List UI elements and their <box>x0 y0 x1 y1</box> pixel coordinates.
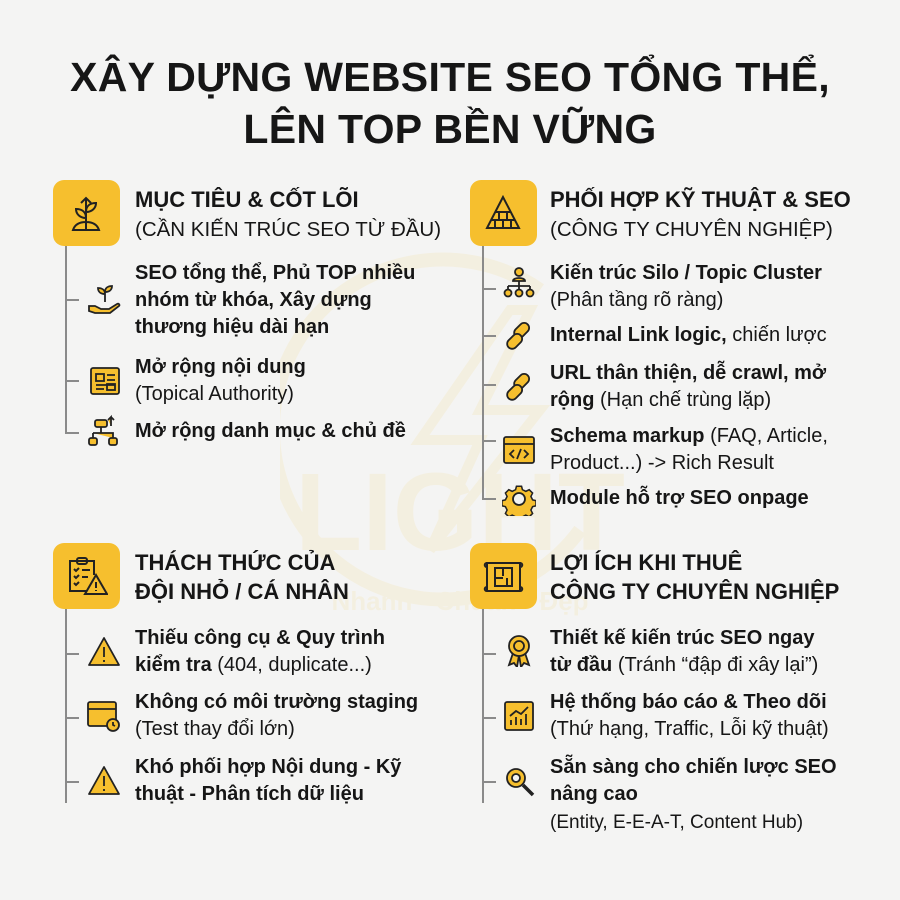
item: module <box>502 486 809 516</box>
item: thiet ke <box>508 627 818 676</box>
item: schema: Product...) -> Rich Result <box>550 452 774 474</box>
item: bao cao <box>504 691 829 740</box>
item: schema: Schema markup (FAQ, Article, <box>550 425 828 447</box>
heading: CÔNG TY CHUYÊN NGHIỆP <box>550 579 839 604</box>
item: staging <box>87 691 418 740</box>
panel: phoi hop ky thuat <box>470 180 851 516</box>
heading: (CẦN KIẾN TRÚC SEO TỪ ĐẦU) <box>135 218 441 241</box>
heading <box>550 550 839 604</box>
watermark logo <box>280 252 625 616</box>
item: bao cao: Hệ thống báo cáo & Theo dõi <box>550 691 827 713</box>
item: thiet ke: Thiết kế kiến trúc SEO ngay <box>550 627 815 649</box>
item: seo tong the: thương hiệu dài hạn <box>135 316 329 338</box>
heading: ĐỘI NHỎ / CÁ NHÂN <box>135 579 349 604</box>
item: thieu cong cu: Thiếu công cụ & Quy trình <box>135 627 385 649</box>
item: san sang: (Entity, E-E-A-T, Content Hub) <box>550 812 803 833</box>
item: san sang <box>506 754 837 833</box>
title: XÂY DỰNG WEBSITE SEO TỔNG THỂ, <box>70 54 830 100</box>
icon: blueprint <box>470 543 537 609</box>
item: url: URL thân thiện, dễ crawl, mở <box>550 362 826 384</box>
item: staging: (Test thay đổi lớn) <box>135 718 295 740</box>
panel: thach thuc <box>53 543 418 805</box>
item: kho phoi hop: Khó phối hợp Nội dung - Kỹ <box>135 756 401 778</box>
item: seo tong the <box>88 262 415 338</box>
item: kho phoi hop <box>88 756 402 805</box>
heading: MỤC TIÊU & CỐT LÕI <box>135 187 359 212</box>
item: thiet ke: từ đầu (Tránh “đập đi xây lại”) <box>550 654 818 676</box>
panel: loi ich <box>470 543 839 833</box>
item: internal link: Internal Link logic, chiến lược <box>550 324 827 346</box>
item: thieu cong cu <box>88 627 385 676</box>
watermark logo: LIGHT <box>295 451 625 574</box>
item: module: Module hỗ trợ SEO onpage <box>550 487 809 509</box>
icon: pyramid <box>470 180 537 246</box>
heading: PHỐI HỢP KỸ THUẬT & SEO <box>550 187 851 212</box>
item: mo rong noi dung: Mở rộng nội dung <box>135 356 306 378</box>
item: seo tong the: nhóm từ khóa, Xây dựng <box>135 289 372 311</box>
heading: LỢI ÍCH KHI THUÊ <box>550 550 742 575</box>
item: schema <box>503 425 828 474</box>
panel: muc tieu <box>53 180 441 446</box>
heading: THÁCH THỨC CỦA <box>135 550 335 575</box>
item: url <box>506 360 826 411</box>
item: silo <box>504 262 822 311</box>
heading <box>135 187 441 241</box>
item: san sang: nâng cao <box>550 783 638 805</box>
item: kho phoi hop: thuật - Phân tích dữ liệu <box>135 783 364 805</box>
icon: plant <box>53 180 120 246</box>
item: url: rộng (Hạn chế trùng lặp) <box>550 389 771 411</box>
item: internal link <box>506 322 827 350</box>
item: seo tong the: SEO tổng thể, Phủ TOP nhiều <box>135 262 415 284</box>
item: mo rong noi dung <box>90 356 306 405</box>
title <box>70 54 830 152</box>
item: staging: Không có môi trường staging <box>135 691 418 713</box>
item: thieu cong cu: kiểm tra (404, duplicate...) <box>135 654 372 676</box>
heading <box>550 187 851 241</box>
item: mo rong danh muc <box>88 415 406 446</box>
item: mo rong noi dung: (Topical Authority) <box>135 383 294 405</box>
title: LÊN TOP BỀN VỮNG <box>243 106 657 152</box>
item: silo: (Phân tầng rõ ràng) <box>550 289 723 311</box>
heading: (CÔNG TY CHUYÊN NGHIỆP) <box>550 218 833 241</box>
heading <box>135 550 349 604</box>
item: mo rong danh muc: Mở rộng danh mục & chủ đề <box>135 420 406 442</box>
item: silo: Kiến trúc Silo / Topic Cluster <box>550 262 822 284</box>
item: bao cao: (Thứ hạng, Traffic, Lỗi kỹ thuật) <box>550 718 829 740</box>
item: san sang: Sẵn sàng cho chiến lược SEO <box>550 756 837 778</box>
watermark logo: Nhanh - Chuẩn - Đẹp <box>331 586 589 616</box>
icon: clipboard warning <box>53 543 120 609</box>
